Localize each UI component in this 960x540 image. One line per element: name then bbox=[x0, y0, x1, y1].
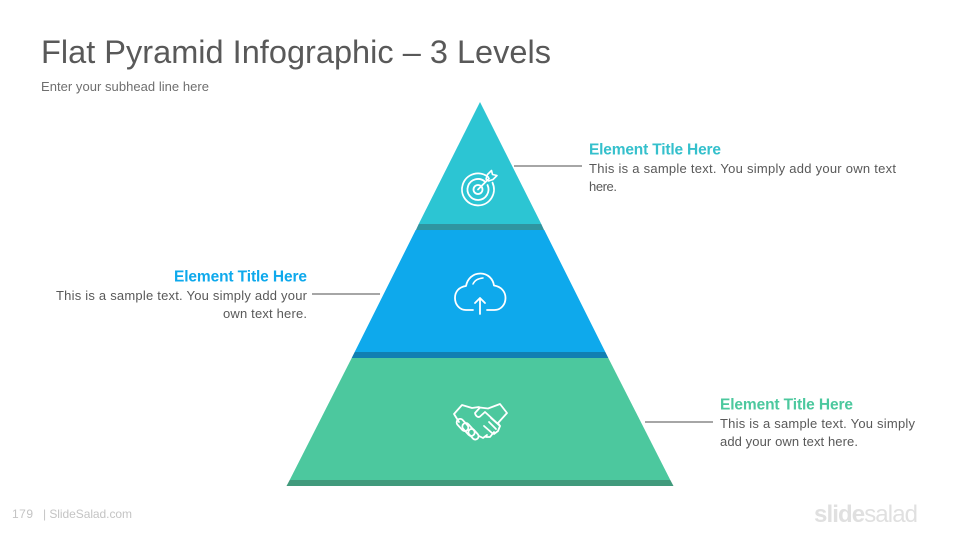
callout: top level: here. bbox=[589, 179, 617, 194]
icon: handshake bbox=[454, 404, 507, 441]
callout: top level bbox=[514, 142, 896, 194]
callout: bottom level: Element Title Here bbox=[720, 396, 853, 414]
pyramid level 2: middle bbox=[352, 230, 608, 358]
callout: middle level: This is a sample text. You simply add your bbox=[56, 288, 308, 303]
callout: middle level bbox=[56, 268, 380, 321]
pyramid bbox=[286, 102, 674, 486]
callout: middle level: own text here. bbox=[223, 306, 307, 321]
callout: bottom level bbox=[645, 396, 916, 449]
callout: top level: Element Title Here bbox=[589, 142, 721, 158]
callout: top level: This is a sample text. You simply add your own text bbox=[589, 161, 896, 176]
icon: cloud upload bbox=[455, 274, 506, 314]
pyramid level 1: top bbox=[416, 102, 544, 230]
callout: bottom level: add your own text here. bbox=[720, 434, 858, 449]
footer source: | SlideSalad.com bbox=[43, 507, 132, 521]
footer page number: 179 bbox=[12, 507, 33, 521]
icon: target with arrow bbox=[462, 170, 497, 205]
subhead: Enter your subhead line here bbox=[41, 79, 209, 94]
callout: middle level: Element Title Here bbox=[174, 268, 307, 286]
callout: bottom level: This is a sample text. You simply bbox=[720, 416, 916, 431]
pyramid level 3: bottom bbox=[286, 358, 674, 486]
title: Flat Pyramid Infographic – 3 Levels bbox=[41, 34, 551, 70]
footer logo wordmark: slidesalad bbox=[814, 501, 918, 528]
